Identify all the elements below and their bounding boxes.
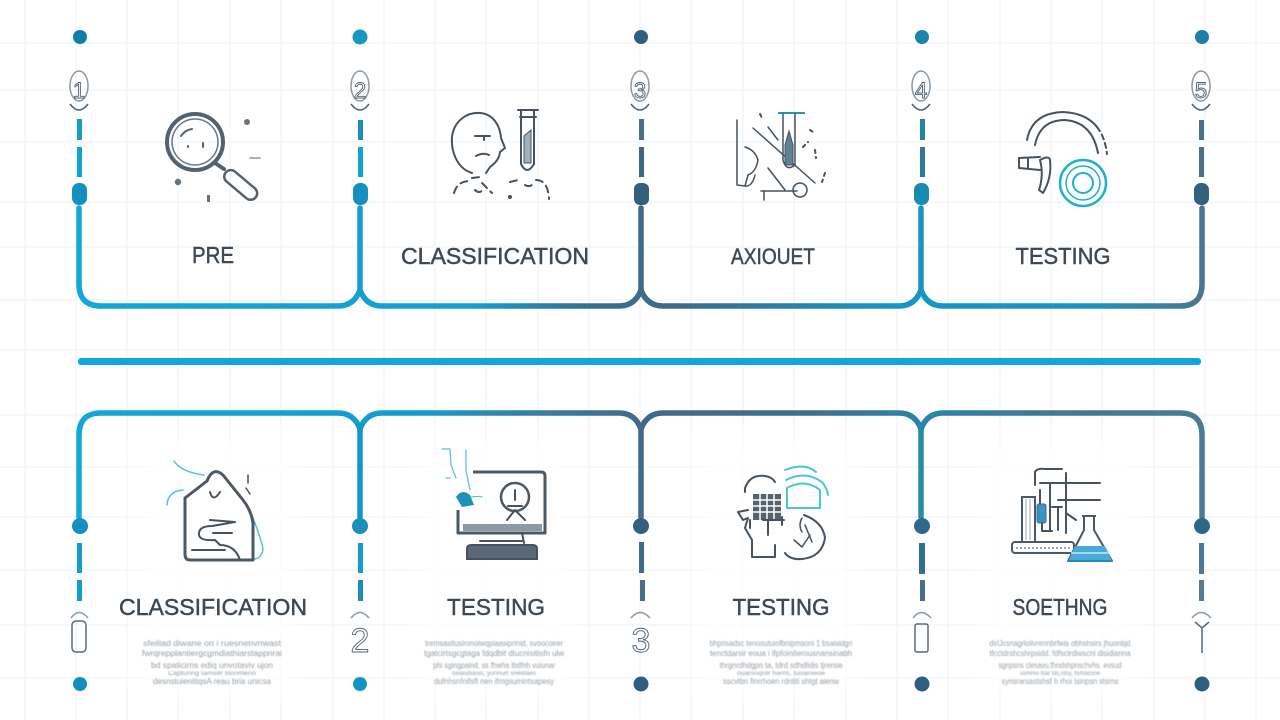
icon: monitor with gauge (442, 449, 545, 559)
icon: magnifying glass (167, 114, 260, 202)
heading: AXIQUET: AXIOUET (731, 244, 815, 269)
heading: SOETHNG: SOETHNG (1012, 594, 1108, 620)
bottom node column 2 (351, 518, 369, 691)
text block: testing description 2: ouarsnqrdr harns, tuoainwoe (737, 671, 826, 677)
heading: TESTING 1: TESTING (447, 594, 545, 620)
icon: headset and target (1019, 112, 1107, 206)
text block: classification description: Capturing tamser tilorimenn (168, 671, 256, 677)
bottom frame connector (79, 413, 1202, 517)
top node column 3 (631, 30, 649, 205)
text block: testing description 2: sscvtbn finrrhoen rdntiti shtgt aienw (723, 677, 839, 686)
text block: classification description: bd spaticirns ediq unvotaviv ujon (151, 661, 273, 670)
bottom node column 1 (71, 518, 88, 691)
text block: testing description 2 (710, 639, 852, 686)
text block: sorting description: usmrno tsar tds,rdsy, hufsticsne (1020, 671, 1101, 677)
central divider (78, 358, 1201, 365)
heading: TESTING 2: TESTING (732, 594, 830, 620)
text block: sorting description: sgnpsns clesavu.fhndshpnschvhs. evsud (998, 661, 1122, 670)
top node column 2: 2 (354, 78, 366, 103)
bottom node column 5 (1192, 518, 1211, 692)
text block: classification description: fwrqrepplantiergcgmdiathiarstappnrai (142, 649, 282, 658)
text block: testing description 1: dufnhsnfnifsft nen ifmgsumintsapesy (434, 677, 554, 686)
bottom node column 4 (913, 518, 931, 692)
bottom node column 3 (631, 518, 650, 692)
icon: lab apparatus with flask (1012, 469, 1112, 561)
bottom node column 2: 2 (351, 622, 369, 660)
heading: PRE: PRE (192, 242, 234, 268)
text block: testing description 1: phi sgingpaind, ss fhwha ibdfnh vuiunar (433, 661, 555, 670)
text block: testing description 1: tgatcirtsgcgtaga fdqdbit dtucnisitisfn ulw (424, 649, 564, 658)
text block: testing description 1 (424, 639, 564, 686)
top node column 2 (351, 30, 369, 205)
text block: testing description 2: thrgnrdhdgpn ta, tdrd sdhdlidis tjrense (720, 661, 843, 670)
top node column 1 (70, 30, 88, 205)
text block: testing description 1: tremsasitusironoiwqpiaasiprinid, svoocoirer (425, 639, 563, 648)
text block: testing description 1: seakidiasis, yunnurt sneidaes (452, 671, 536, 677)
text block: classification description: desnstuienitiqsA reau bria unicsa (153, 677, 272, 686)
icon: hand with calculator (738, 466, 828, 559)
icon: tag with machine (167, 461, 263, 560)
text block: classification description: sfeiliad diwane on i ruesnenvnwast (143, 639, 282, 648)
bottom node column 3: 3 (632, 622, 650, 660)
icon: lab equipment sketch (737, 113, 825, 200)
text block: sorting description (990, 639, 1131, 686)
text block: sorting description: synsrarsastshsf h rhoi tsinpsn stsrns (1002, 677, 1118, 686)
text block: classification description (142, 639, 282, 686)
heading: CLASSIFICATION bottom: CLASSIFICATION (119, 594, 307, 620)
text block: sorting description: tfcctdrshcshrpsidd. fdfscirdiwscni disidianna (990, 649, 1131, 658)
icon: head and test tube (452, 110, 549, 199)
top node column 5: 5 (1195, 78, 1207, 103)
heading: CLASSIFICATION top: CLASSIFICATION (401, 243, 589, 269)
top node column 5 (1192, 30, 1210, 205)
top node column 1: 1 (73, 78, 85, 103)
heading: TESTING top: TESTING (1016, 243, 1110, 269)
text block: testing description 2: bhprisadsc tenosutuiofbnipmsoni 1 bsaisidgn (710, 639, 852, 648)
top node column 4: 4 (915, 78, 927, 103)
top node column 4 (912, 30, 930, 205)
top frame connector (79, 208, 1202, 306)
top node column 3: 3 (634, 78, 646, 103)
text block: testing description 2: tenctdarsir eoua i ifpfoiniterousnansinabh (710, 649, 852, 658)
text block: sorting description: dirlJcsnagrlolivrennbrfwis obhshsirs jhuonbjd (990, 639, 1130, 648)
